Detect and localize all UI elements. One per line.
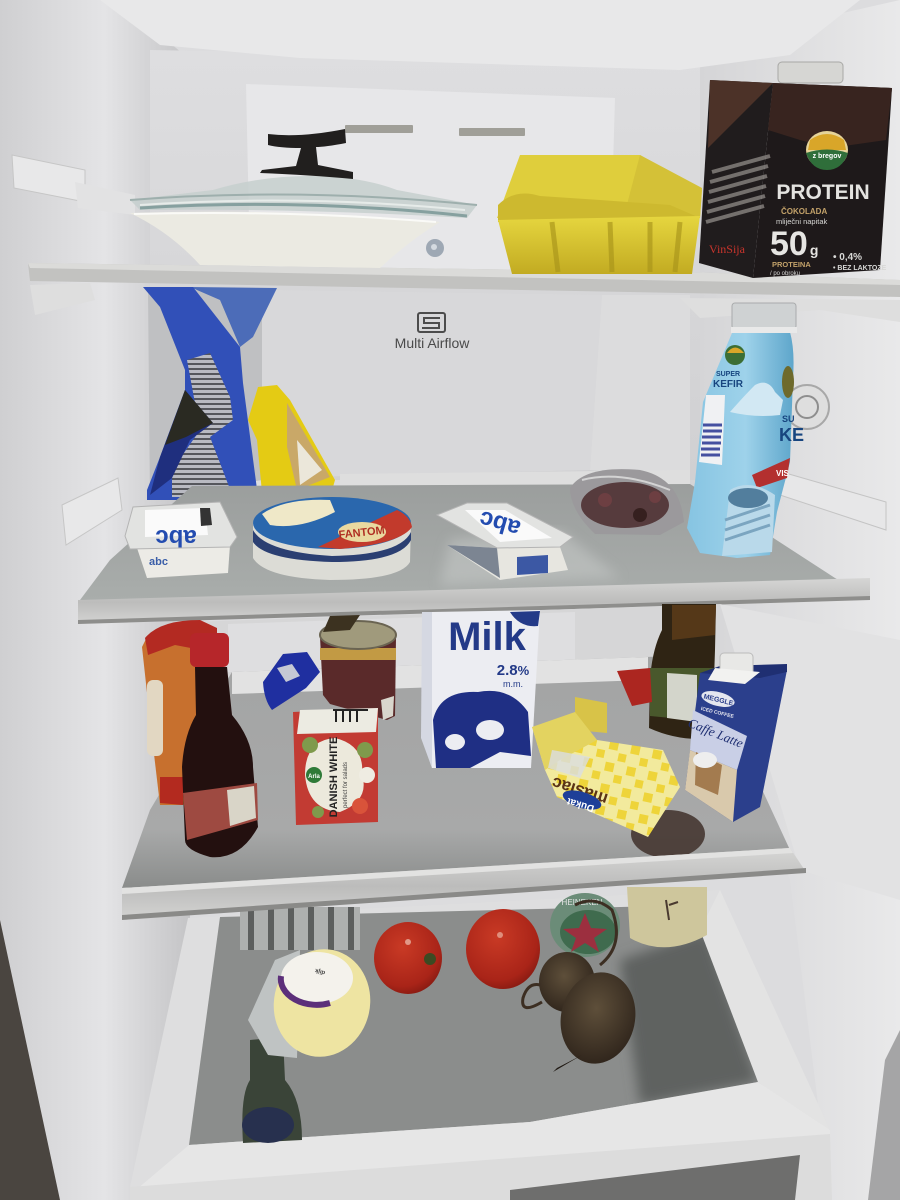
abc cream cheese tub, left: abc: [149, 556, 168, 568]
caffe latte carton: MEGGLE: [703, 693, 734, 708]
protein chocolate drink carton: PROTEIN: [776, 181, 870, 204]
clouds: [730, 383, 783, 416]
caffe latte carton: Caffe Latte: [686, 715, 746, 751]
second shelf glass: [80, 470, 870, 600]
lid knob: [260, 129, 353, 179]
cap: [778, 62, 843, 83]
shelf 2 front edge: [78, 578, 870, 624]
label panel: [690, 710, 747, 770]
danish white cheese box: Arla: [308, 774, 320, 780]
protein chocolate drink carton: • BEZ LAKTOZE: [833, 265, 887, 272]
abc cream cheese tub, right: abc: [476, 505, 523, 542]
beetroots: [523, 901, 644, 1072]
canned food: [320, 615, 396, 720]
middle compartment back wall with Multi Airflow logo: Multi Airflow: [395, 335, 470, 351]
heineken can: [550, 893, 620, 957]
yellow snack packet: [248, 385, 335, 503]
glass lid: [130, 176, 477, 218]
protein chocolate drink carton: mliječni napitak: [776, 217, 828, 226]
door rail clips, left wall: [12, 155, 135, 545]
kefir bottle: KE: [779, 425, 804, 445]
milk carton: [421, 610, 540, 768]
danish white cheese box: [293, 708, 378, 825]
orange juice bottle: [142, 620, 217, 805]
top shelf: [28, 263, 900, 297]
butter package: maslac: [549, 773, 610, 809]
logo: z bregov: [806, 131, 848, 170]
round cheese: [248, 940, 380, 1066]
round cheese: dijk: [314, 967, 326, 975]
danish white cheese box: DANISH WHITE: [328, 737, 340, 817]
dark sauce bottle: [182, 633, 258, 857]
round cheese box: [253, 497, 412, 580]
abc cream cheese tub, left: [125, 502, 237, 578]
plate and glass lid: [130, 129, 477, 268]
foil wrapped candy: [263, 652, 320, 710]
kefir bottle: [687, 303, 804, 558]
round cheese box: FANTOM: [338, 525, 385, 541]
protein chocolate drink carton: VinSija: [709, 242, 746, 256]
abc cream cheese tub, left: abc: [155, 524, 197, 551]
protein chocolate drink carton: • 0,4%: [833, 252, 862, 263]
kefir bottle: KEFIR: [713, 379, 744, 390]
dark reflected object beneath shelf: [631, 810, 705, 858]
egg carton: [497, 155, 702, 274]
plate: [130, 212, 440, 268]
beer bottle: [649, 604, 716, 739]
protein chocolate drink carton: [699, 62, 892, 278]
barcode panel: [699, 395, 725, 465]
tomato left: [374, 922, 442, 994]
protein chocolate drink carton: ČOKOLADA: [781, 207, 827, 216]
rear air duct panel: [246, 84, 615, 270]
door rail right, top: [680, 298, 900, 530]
protein chocolate drink carton: 50g: [770, 225, 818, 263]
lower compartment walls: [122, 604, 900, 900]
kefir bottle: SUPER: [716, 371, 740, 378]
caffe latte carton: [685, 653, 787, 822]
tomato right: [466, 909, 540, 989]
bottom drawer: [130, 890, 832, 1200]
milky jar: [627, 887, 707, 947]
bag of dried fruit: [570, 469, 684, 535]
caffe latte carton: ICED COFFEE: [700, 706, 735, 720]
protein chocolate drink carton: PROTEINA: [772, 260, 811, 269]
middle compartment back wall with Multi Airflow logo: [148, 290, 690, 500]
kefir bottle: SU: [782, 414, 795, 424]
butter package: Dukat: [565, 795, 596, 814]
shelf 3 front edge: [122, 848, 806, 920]
abc cream cheese tub, right: [437, 503, 573, 580]
blue snack bag: [143, 287, 277, 522]
logo: z bregov: z bregov: [813, 153, 841, 160]
heineken can: HEINEKEN: [562, 898, 603, 907]
danish white cheese box: perfect for salads: [343, 762, 349, 808]
red card: [617, 668, 652, 706]
protein chocolate drink carton: / po obroku: [770, 271, 800, 277]
milk carton: m.m.: [503, 679, 523, 689]
butter package: [532, 697, 680, 837]
green bottle in drawer: [242, 1037, 302, 1143]
milk carton: Milk: [448, 615, 527, 659]
milk carton: 2.8%: [497, 662, 530, 679]
kefir bottle: VIS: [776, 469, 790, 478]
